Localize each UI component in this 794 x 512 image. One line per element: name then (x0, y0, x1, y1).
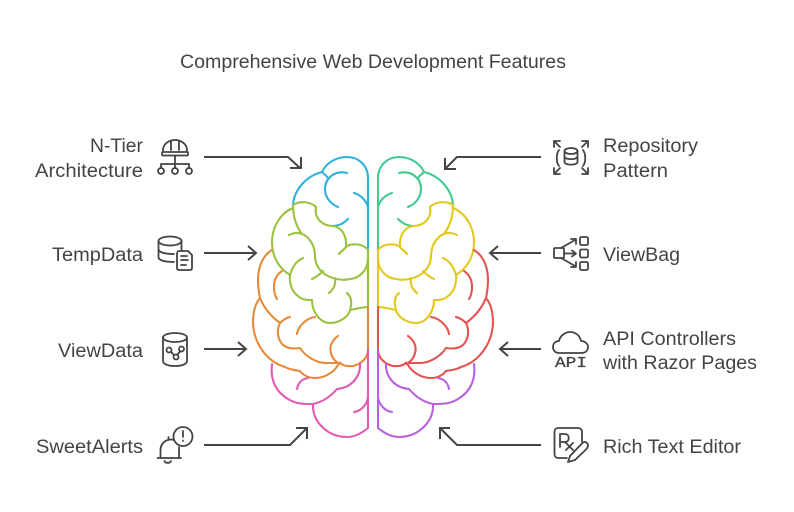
label: Rich Text Editor: Rich Text Editor (603, 437, 742, 458)
right yellow lobe (378, 202, 474, 323)
icon: TempData database with document (158, 236, 192, 270)
label: API Controllers with Razor Pages: with Razor Pages (602, 353, 757, 374)
label: API Controllers with Razor Pages: API Controllers (603, 329, 736, 350)
arrow: API Controllers to brain (500, 342, 541, 356)
icon: API cloud: API (555, 355, 587, 372)
left green lobe (272, 202, 368, 323)
left blue lobe (293, 157, 368, 249)
icon: ViewData cylinder with nodes (163, 333, 187, 366)
icon: N-Tier hard hat and hierarchy (158, 140, 192, 174)
arrow: ViewData to brain (204, 342, 246, 356)
arrow: Repository Pattern to brain (445, 157, 541, 169)
label: ViewData: ViewData (58, 341, 143, 362)
right purple lobe (378, 350, 474, 437)
label: N-Tier Architecture: Architecture (35, 161, 143, 182)
label: Repository Pattern: Repository (603, 136, 699, 157)
left hemisphere (253, 157, 368, 437)
icon: ViewBag boxes and arrows (554, 237, 588, 270)
label: API Controllers with Razor Pages (602, 329, 757, 374)
label: ViewBag: ViewBag (603, 245, 680, 266)
label: TempData: TempData (52, 245, 143, 266)
icon: API cloud (553, 332, 588, 372)
brain illustration (253, 157, 493, 437)
left orange lobe (253, 250, 368, 378)
icon: Rich text editor Rx with pencil (554, 428, 588, 462)
arrow: SweetAlerts to brain (204, 428, 307, 445)
icon: SweetAlerts bell with alert (158, 427, 192, 463)
label: Repository Pattern: Pattern (603, 161, 668, 182)
arrow: TempData to brain (204, 246, 256, 260)
arrow: ViewBag to brain (490, 246, 541, 260)
label: Repository Pattern (603, 136, 699, 182)
right green lobe (378, 157, 453, 249)
label: N-Tier Architecture (35, 136, 144, 182)
right red lobe (378, 250, 493, 378)
label: SweetAlerts: SweetAlerts (36, 437, 143, 458)
title: Comprehensive Web Development Features (180, 52, 566, 73)
right hemisphere (378, 157, 493, 437)
left pink lobe (272, 350, 368, 437)
arrow: Rich Text Editor to brain (440, 428, 541, 445)
arrow: N-Tier to brain (204, 157, 301, 168)
icon: Repository pattern (554, 141, 588, 174)
label: N-Tier Architecture: N-Tier (90, 136, 144, 157)
